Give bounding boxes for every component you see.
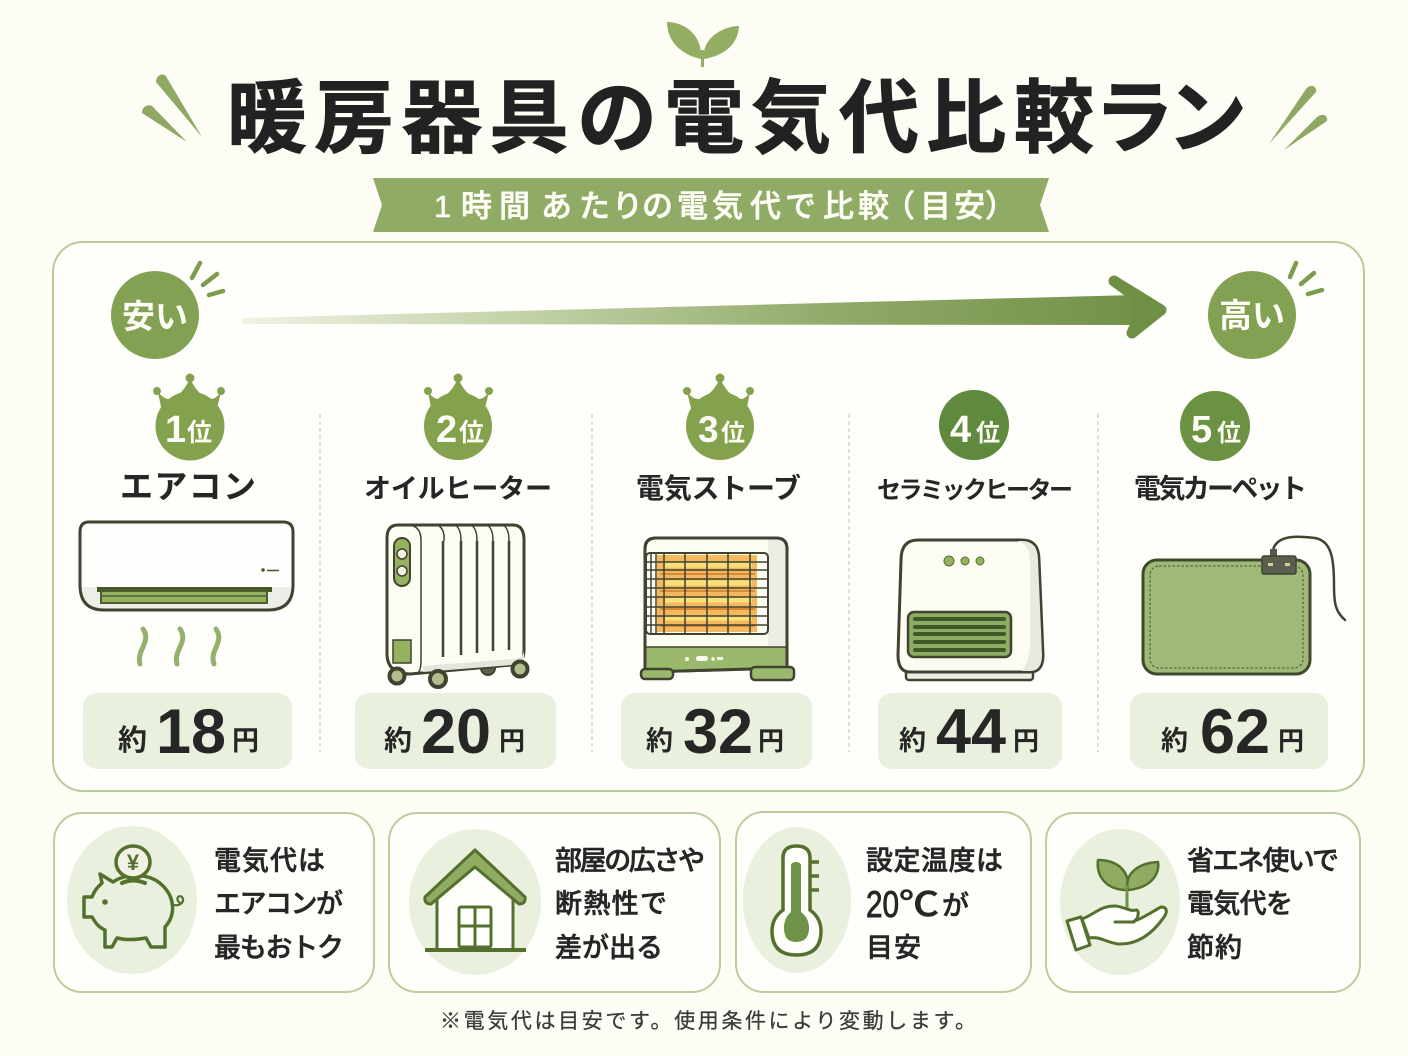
badge: rank 2: 2 bbox=[436, 409, 457, 451]
column: rank 3 electric stove bbox=[621, 374, 812, 769]
text: tip 4: 節約 bbox=[1187, 933, 1242, 963]
label: cheap bbox=[111, 263, 223, 359]
icon: piggy bank: ¥ bbox=[127, 850, 140, 875]
price: rank 2: 約 bbox=[384, 725, 412, 756]
column: rank 4 ceramic heater bbox=[877, 390, 1073, 769]
price: rank 4: 44 bbox=[936, 697, 1006, 767]
panel: tip energy saving bbox=[1046, 813, 1360, 992]
text: tip 3: 設定温度は bbox=[866, 846, 1003, 876]
text: tip 1 bbox=[214, 846, 344, 963]
text: tip 2: 部屋の広さや bbox=[555, 846, 705, 876]
icon: ceramic heater bbox=[898, 540, 1043, 680]
text: tip 1: 電気代は bbox=[214, 846, 325, 876]
badge: rank 3: 3 bbox=[698, 409, 719, 450]
price: rank 2: 20 bbox=[421, 697, 491, 767]
panel: ranking bbox=[53, 242, 1364, 791]
footnote: ※電気代は目安です。使用条件により変動します。 bbox=[440, 1010, 976, 1033]
name: electric carpet: 電気カーペット bbox=[1134, 474, 1307, 504]
label: expensive bbox=[1208, 263, 1322, 359]
panel: tip air conditioner bbox=[54, 813, 374, 992]
name: oil heater: オイルヒーター bbox=[364, 474, 552, 504]
price: rank 3 bbox=[621, 693, 812, 769]
icon: electric stove bbox=[641, 538, 794, 680]
price: rank 3: 32 bbox=[683, 697, 753, 767]
text: tip 3: が bbox=[942, 891, 969, 921]
icon: house bbox=[425, 850, 526, 950]
price: rank 5 bbox=[1130, 693, 1328, 769]
price: rank 4 bbox=[878, 693, 1062, 769]
text: tip 1: 最もおトク bbox=[214, 933, 344, 963]
name: ceramic heater: セラミックヒーター bbox=[877, 477, 1073, 504]
subtitle ribbon: 1時間あたりの電気代で比較（目安） bbox=[434, 189, 1016, 224]
text: tip 3: 目安 bbox=[866, 933, 921, 963]
price: rank 3: 円 bbox=[758, 726, 784, 756]
badge: rank 1: 位 bbox=[187, 419, 212, 447]
badge: rank 4: 4 bbox=[950, 409, 971, 451]
name: electric stove: 電気ストーブ bbox=[636, 472, 801, 504]
panel: tip temperature bbox=[736, 812, 1031, 992]
price: rank 1: 約 bbox=[118, 724, 147, 757]
price: rank 4: 円 bbox=[1013, 726, 1039, 756]
badge: rank 5 bbox=[1180, 391, 1250, 461]
label: cheap: 安い bbox=[122, 298, 188, 335]
badge: rank 3: 位 bbox=[721, 420, 745, 447]
text: tip 2: 差が出る bbox=[555, 933, 663, 963]
price: rank 2: 円 bbox=[499, 726, 525, 756]
price: rank 4: 約 bbox=[899, 726, 926, 756]
price: rank 5: 62 bbox=[1200, 697, 1270, 767]
badge: rank 4: 位 bbox=[976, 420, 1000, 447]
text: tip 1: エアコンが bbox=[214, 889, 343, 919]
icon: sprout above title bbox=[667, 22, 739, 67]
icon: hand with sprout bbox=[1067, 860, 1166, 950]
badge: rank 1: 1 bbox=[165, 409, 186, 451]
subtitle ribbon bbox=[373, 178, 1049, 232]
badge: rank 5: 位 bbox=[1217, 420, 1241, 447]
text: tip 2: 断熱性で bbox=[555, 889, 667, 919]
icon: left accent strokes bbox=[142, 75, 202, 142]
badge: rank 2 bbox=[424, 374, 493, 460]
icon: piggy bank bbox=[84, 846, 183, 947]
icon: electric carpet bbox=[1143, 537, 1345, 674]
badge: rank 2: 位 bbox=[459, 419, 484, 447]
label: expensive: 高い bbox=[1219, 297, 1285, 334]
badge: rank 1 bbox=[153, 374, 225, 460]
price: rank 5: 円 bbox=[1278, 726, 1304, 756]
column: rank 2 oil heater bbox=[355, 374, 556, 769]
icon: air conditioner bbox=[80, 522, 293, 664]
column: rank 5 electric carpet bbox=[1130, 391, 1345, 769]
price: rank 5: 約 bbox=[1161, 726, 1188, 756]
price: rank 3: 約 bbox=[646, 726, 673, 756]
text: tip 4 bbox=[1187, 846, 1339, 963]
text: tip 3: 20 bbox=[866, 884, 899, 925]
text: tip 4: 省エネ使いで bbox=[1187, 846, 1339, 876]
column: rank 1 air conditioner bbox=[80, 374, 293, 769]
price: rank 1: 円 bbox=[232, 726, 259, 756]
text: tip 4: 電気代を bbox=[1187, 889, 1293, 919]
name: air conditioner: エアコン bbox=[120, 468, 256, 505]
badge: rank 5: 5 bbox=[1191, 409, 1212, 451]
text: tip 3 bbox=[866, 846, 1003, 963]
badge: rank 3 bbox=[683, 374, 754, 460]
icon: oil heater bbox=[387, 525, 528, 687]
icon: right accent strokes bbox=[1269, 86, 1327, 150]
text: tip 3: ℃ bbox=[899, 886, 939, 924]
price: rank 2 bbox=[355, 693, 556, 769]
icon: thermometer bbox=[772, 846, 821, 955]
price: rank 1 bbox=[83, 693, 292, 769]
badge: rank 4 bbox=[939, 390, 1009, 460]
arrow: cost increasing bbox=[242, 281, 1161, 333]
text: tip 2 bbox=[555, 846, 705, 963]
title: 暖房器具の電気代比較ラン bbox=[227, 74, 1247, 163]
price: rank 1: 18 bbox=[156, 697, 226, 767]
panel: tip room bbox=[389, 813, 720, 992]
